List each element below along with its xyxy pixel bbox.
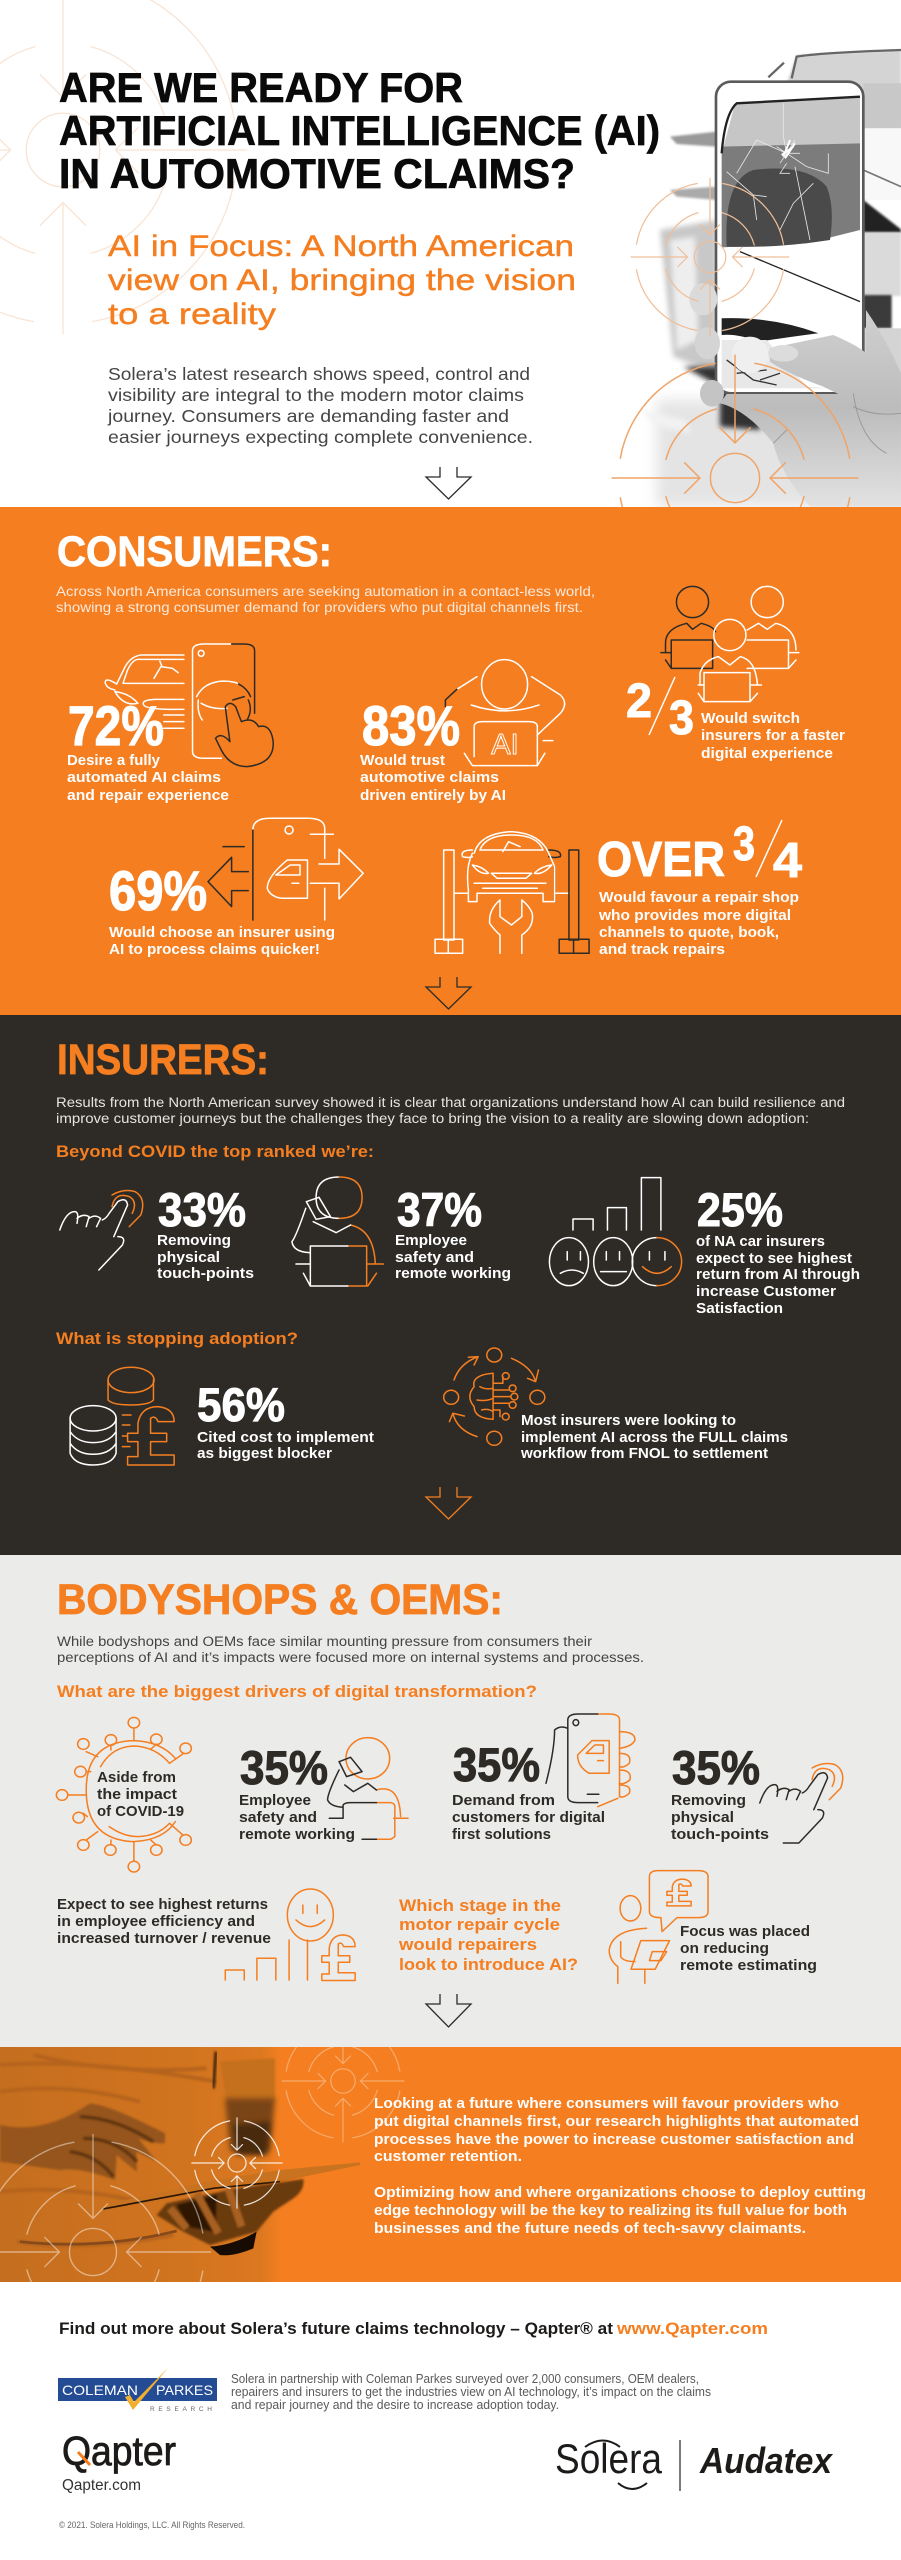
decorative target pattern <box>0 0 247 334</box>
callout: expected returns <box>57 1896 271 1947</box>
stat: 72%: 72% <box>68 694 164 757</box>
logo: Coleman Parkes Research <box>58 2368 217 2413</box>
bodyshops intro <box>57 1634 644 1665</box>
copyright: © 2021. Solera Holdings, LLC. All Rights Reserved. <box>59 2520 245 2531</box>
stat: 25%: of NA car insurers <box>696 1233 825 1250</box>
panel: conclusion banner with tablet photo <box>0 2047 901 2282</box>
logo: Qapter <box>62 2428 176 2494</box>
subtitle: AI in Focus: A North American <box>108 230 574 263</box>
stat: 35% touch-points: touch-points <box>671 1826 769 1843</box>
icon: smiley, bars and pound <box>225 1889 355 1981</box>
callout: expected returns: Expect to see highest returns <box>57 1896 268 1913</box>
insurers intro: improve customer journeys but the challenges they face to bring the vision to a reality are slowing down adoption: <box>56 1111 809 1126</box>
stat: 33% <box>157 1183 254 1282</box>
stat: 35% digital demand: 35% <box>453 1738 540 1791</box>
icon: hand holding phone <box>546 1714 635 1807</box>
label: aside from covid: of COVID-19 <box>97 1803 184 1820</box>
icon: car and phone touch <box>105 644 273 767</box>
panel: insurers <box>0 1015 901 1555</box>
stat: 37%: Employee <box>395 1232 467 1249</box>
stat: 83%: 83% <box>362 694 460 757</box>
consumers intro: showing a strong consumer demand for providers who put digital channels first. <box>56 600 583 615</box>
logo: Qapter: Qapter <box>62 2428 176 2474</box>
callout: expected returns: increased turnover / revenue <box>57 1930 271 1947</box>
icon: three people with laptops <box>661 586 799 702</box>
stat: 33%: Removing <box>157 1232 231 1249</box>
stat: 25%: Satisfaction <box>696 1300 783 1317</box>
label: aside from covid: the impact <box>97 1786 177 1803</box>
logo: Solera Audatex <box>555 2435 834 2491</box>
call to action: Find out more about Solera’s future claims technology – Qapter® at <box>59 2319 613 2338</box>
label: aside from covid <box>97 1769 184 1820</box>
conclusion text: customer retention. <box>374 2148 522 2165</box>
stat: over three quarters <box>597 818 802 958</box>
callout: full claims workflow: workflow from FNOL to settlement <box>520 1445 768 1462</box>
stat: 69%: Would choose an insurer using <box>109 924 335 941</box>
conclusion text: processes have the power to increase customer satisfaction and <box>374 2131 854 2148</box>
stat: 35% employee safety <box>239 1741 355 1843</box>
panel: bodyshops and OEMs <box>0 1555 901 2047</box>
insurers intro <box>56 1095 845 1126</box>
title: ARTIFICIAL INTELLIGENCE (AI) <box>59 107 660 154</box>
stat: 72%: Desire a fully <box>67 752 161 769</box>
stat: 72%: and repair experience <box>67 787 229 804</box>
logo: Solera Audatex: Solera <box>555 2435 663 2482</box>
stat: 37%: 37% <box>397 1183 482 1236</box>
icon: car on lift with wrench <box>435 832 589 953</box>
stat: 37% <box>395 1183 511 1282</box>
arrow: down to conclusion <box>426 1994 471 2027</box>
stat: two thirds <box>626 675 845 762</box>
photo: hands holding tablet <box>0 2052 360 2255</box>
intro text: easier journeys expecting complete convenience. <box>108 427 533 447</box>
stat: 83%: driven entirely by AI <box>360 787 506 804</box>
stat: 35% digital demand: customers for digital <box>452 1809 605 1826</box>
target rings <box>0 2134 212 2282</box>
callout: remote estimating <box>680 1923 817 1974</box>
stat: 35% touch-points: 35% <box>672 1741 760 1794</box>
callout: full claims workflow: Most insurers were looking to <box>521 1412 736 1429</box>
callout: remote estimating: on reducing <box>680 1940 769 1957</box>
insurers intro: Results from the North American survey showed it is clear that organizations understand how AI can build resilience and <box>56 1095 845 1110</box>
arrow: down to bodyshops <box>426 1487 471 1519</box>
stat: 69% <box>109 859 335 958</box>
stat: 33%: touch-points <box>157 1265 254 1282</box>
icon: AI brain workflow cycle <box>444 1348 545 1445</box>
title: ARE WE READY FOR <box>59 64 463 111</box>
conclusion text: Looking at a future where consumers will favour providers who <box>374 2095 839 2112</box>
logo: Coleman Parkes Research: PARKES <box>156 2382 213 2398</box>
AI label: AI <box>491 729 519 761</box>
stat: two thirds: digital experience <box>701 745 833 762</box>
stat: 25%: expect to see highest <box>696 1250 852 1267</box>
callout: full claims workflow: implement AI across the FULL claims <box>521 1429 788 1446</box>
survey description: Solera in partnership with Coleman Parkes surveyed over 2,000 consumers, OEM dealers, <box>231 2372 699 2386</box>
stat: two thirds: Would switch <box>701 710 800 727</box>
callout: which stage: look to introduce AI? <box>399 1956 578 1974</box>
callout: remote estimating: remote estimating <box>680 1957 817 1974</box>
photo overlay target rings <box>611 178 858 507</box>
stat: 35% employee safety: 35% <box>240 1741 328 1794</box>
stat: 33%: 33% <box>158 1183 246 1236</box>
icon: touch hand <box>60 1191 143 1270</box>
subtitle: to a reality <box>108 298 276 331</box>
call to action: www.Qapter.com <box>616 2319 768 2338</box>
survey description: repairers and insurers to get the industries view on AI technology, it’s impact on the claims <box>231 2385 711 2399</box>
bodyshops intro: While bodyshops and OEMs face similar mounting pressure from consumers their <box>57 1634 593 1649</box>
callout: which stage <box>398 1897 578 1974</box>
stat: 35% touch-points: Removing <box>671 1792 746 1809</box>
stat: two thirds: insurers for a faster <box>701 727 845 744</box>
conclusion text: businesses and the future needs of tech-savvy claimants. <box>374 2220 806 2237</box>
icon: touch hand <box>760 1764 843 1843</box>
logo: Coleman Parkes Research: COLEMAN <box>62 2382 138 2398</box>
bodyshops intro: perceptions of AI and it’s impacts were focused more on internal systems and processes. <box>57 1650 644 1665</box>
stat: 35% employee safety: remote working <box>239 1826 355 1843</box>
stat: 56%: 56% <box>197 1378 285 1431</box>
stat: over three quarters: OVER <box>597 833 725 887</box>
title <box>59 64 660 197</box>
stat: over three quarters: 3 <box>733 818 755 871</box>
subheading: beyond covid: Beyond COVID the top ranked we’re: <box>56 1143 374 1161</box>
stat: 56%: Cited cost to implement <box>197 1429 374 1446</box>
stat: over three quarters: 4 <box>773 834 802 888</box>
stat: 56% <box>197 1378 374 1462</box>
arrow: down to consumers <box>426 467 471 499</box>
label: aside from covid: Aside from <box>97 1769 176 1786</box>
stat: 25%: increase Customer <box>696 1283 836 1300</box>
consumers intro <box>56 584 595 615</box>
icon: person on phone with laptop <box>292 1177 383 1286</box>
intro text: Solera’s latest research shows speed, control and <box>108 364 530 384</box>
intro text <box>107 364 533 447</box>
icon: person with tablet and pound speech bubble <box>609 1871 708 1983</box>
survey description: and repair journey and the desire to increase adoption today. <box>231 2398 559 2412</box>
stat: 35% digital demand: first solutions <box>452 1826 551 1843</box>
heading: bodyshops and OEMs: BODYSHOPS & OEMS: <box>57 1576 503 1624</box>
stat: over three quarters: channels to quote, book, <box>599 924 779 941</box>
arrow: down to insurers <box>426 977 471 1009</box>
stat: 33%: physical <box>157 1249 220 1266</box>
conclusion text: edge technology will be the key to realizing its full value for both <box>374 2202 847 2219</box>
consumers intro: Across North America consumers are seeking automation in a contact-less world, <box>56 584 595 599</box>
panel: consumers <box>0 507 901 1015</box>
stat: 35% employee safety: Employee <box>239 1792 311 1809</box>
stat: 35% employee safety: safety and <box>239 1809 317 1826</box>
stat: 72%: automated AI claims <box>67 769 221 786</box>
survey description <box>231 2372 711 2412</box>
callout: which stage: motor repair cycle <box>399 1916 560 1934</box>
stat: 25%: return from AI through <box>696 1266 860 1283</box>
subheading: digital transformation: What are the biggest drivers of digital transformation? <box>57 1683 537 1701</box>
callout: expected returns: in employee efficiency and <box>57 1913 255 1930</box>
intro text: visibility are integral to the modern motor claims <box>108 385 524 405</box>
callout: which stage: would repairers <box>398 1936 537 1954</box>
photo: hand holding phone showing cracked windscreen <box>640 50 901 507</box>
icon: phone with car door and arrows <box>208 818 363 920</box>
intro text: journey. Consumers are demanding faster and <box>107 406 509 426</box>
heading: insurers: INSURERS: <box>57 1036 269 1084</box>
stat: over three quarters: Would favour a repair shop <box>599 889 799 906</box>
conclusion text <box>374 2095 866 2237</box>
heading: consumers: CONSUMERS: <box>57 528 332 576</box>
stat: 83%: Would trust <box>360 752 445 769</box>
icon: person with AI laptop <box>445 660 565 766</box>
logo: Qapter: Qapter.com <box>62 2477 141 2494</box>
callout: remote estimating: Focus was placed <box>680 1923 810 1940</box>
logo: Coleman Parkes Research: RESEARCH <box>150 2406 212 2413</box>
icon: virus ring <box>56 1717 191 1872</box>
stat: two thirds: 2 <box>626 675 652 728</box>
subtitle: view on AI, bringing the vision <box>108 264 576 297</box>
stat: 35% touch-points <box>671 1741 769 1843</box>
stat: 35% digital demand: Demand from <box>452 1792 555 1809</box>
conclusion text: Optimizing how and where organizations choose to deploy cutting <box>374 2184 866 2201</box>
subheading: what is stopping adoption: What is stopping adoption? <box>56 1330 298 1348</box>
stat: 83% <box>360 694 506 804</box>
subtitle <box>108 230 576 331</box>
logo: Solera Audatex: Audatex <box>699 2440 834 2481</box>
icon: bars and satisfaction faces <box>549 1178 682 1286</box>
stat: 37%: safety and <box>395 1249 474 1266</box>
stat: over three quarters: who provides more digital <box>598 907 791 924</box>
stat: 35% digital demand <box>452 1738 605 1843</box>
stat: 56%: as biggest blocker <box>197 1445 332 1462</box>
icon: person on phone with laptop <box>328 1738 408 1839</box>
callout: which stage: Which stage in the <box>399 1897 561 1915</box>
stat: 69%: AI to process claims quicker! <box>109 941 320 958</box>
stat: 25%: 25% <box>697 1183 783 1236</box>
stat: two thirds: 3 <box>669 692 694 745</box>
title: IN AUTOMOTIVE CLAIMS? <box>59 150 575 197</box>
stat: 69%: 69% <box>109 859 207 922</box>
stat: 72% <box>67 694 229 804</box>
icon: coins and pound sign <box>70 1367 174 1465</box>
callout: full claims workflow <box>520 1412 788 1462</box>
stat: 25% <box>696 1183 860 1317</box>
stat: 35% touch-points: physical <box>671 1809 734 1826</box>
stat: 83%: automotive claims <box>360 769 499 786</box>
stat: 37%: remote working <box>395 1265 511 1282</box>
stat: over three quarters: and track repairs <box>599 941 725 958</box>
conclusion text: put digital channels first, our research highlights that automated <box>374 2113 859 2130</box>
